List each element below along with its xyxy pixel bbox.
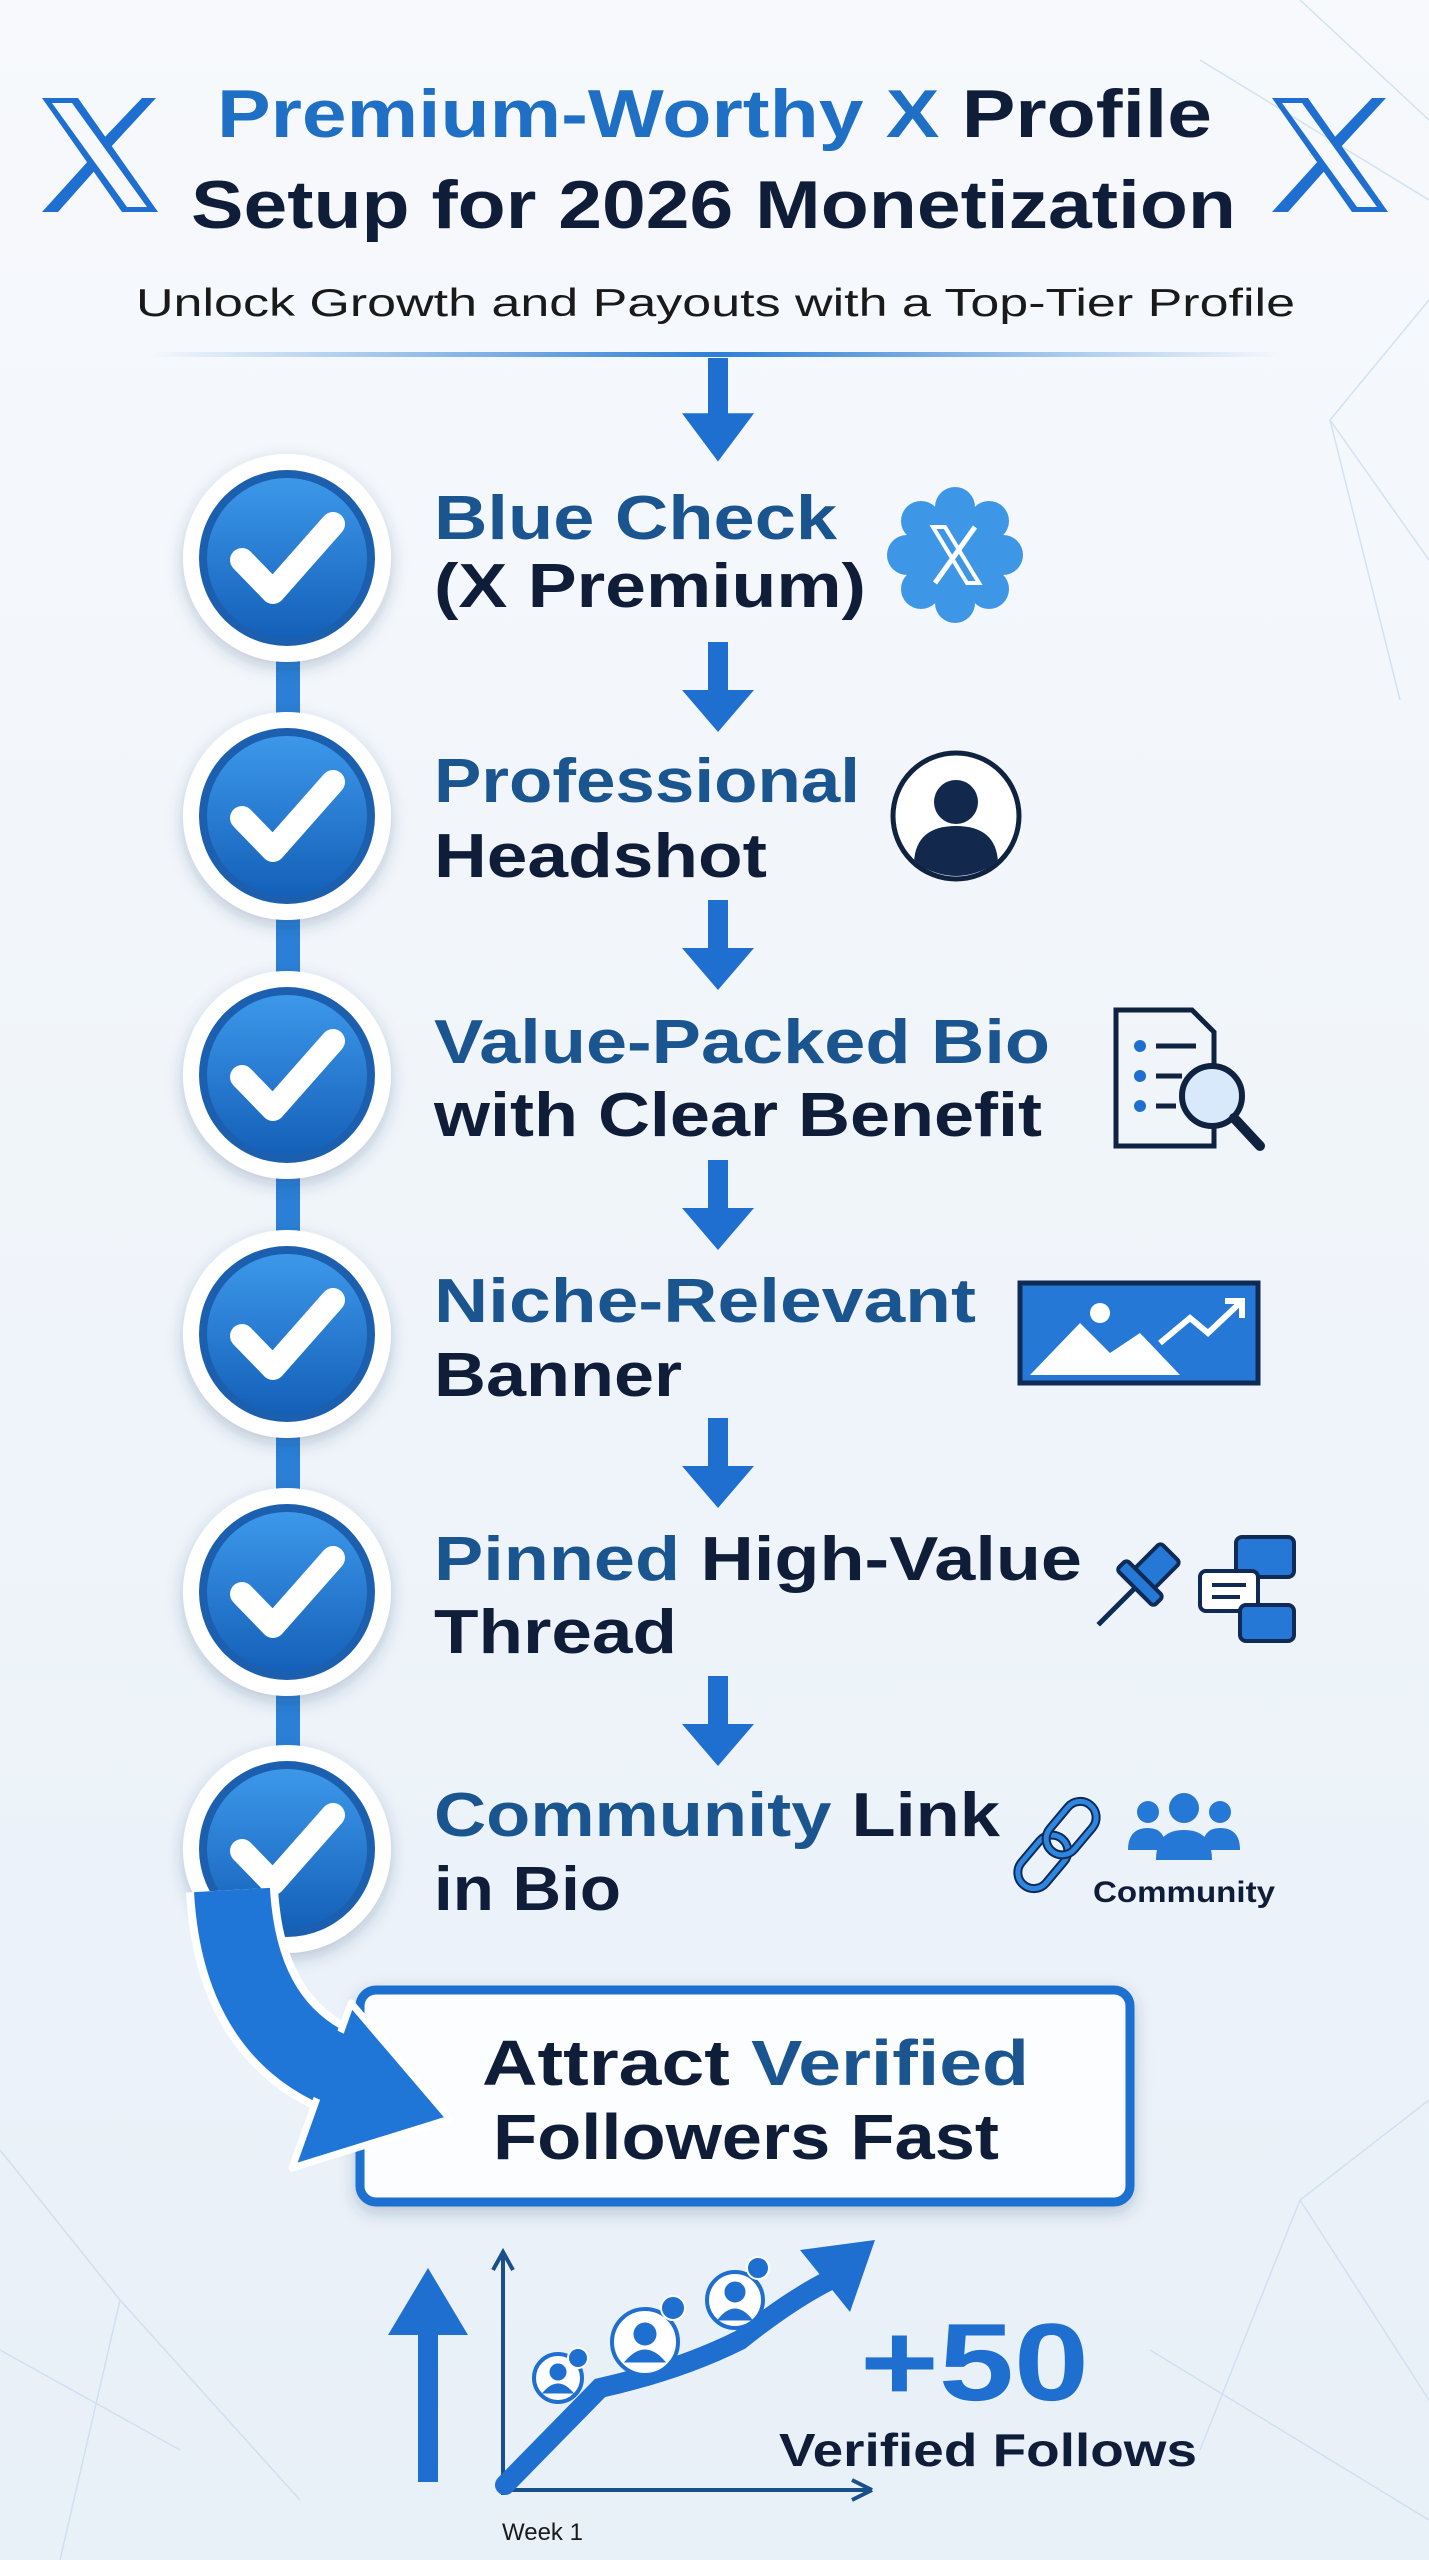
title bbox=[191, 76, 1236, 243]
title: Premium-Worthy X Profile bbox=[217, 76, 1212, 152]
icon: verified badge bbox=[887, 487, 1023, 623]
step 1: (X Premium) bbox=[434, 552, 866, 621]
step 3: with Clear Benefit bbox=[433, 1081, 1042, 1150]
icon: document search bbox=[1116, 1010, 1260, 1146]
icon: headshot bbox=[893, 753, 1019, 879]
stat: +50 verified follows: +50 bbox=[860, 2301, 1089, 2424]
arrow 4 bbox=[682, 1418, 754, 1508]
arrow: top bbox=[682, 358, 754, 462]
step 3: Value-Packed Bio bbox=[434, 1008, 1050, 1077]
arrow 5 bbox=[682, 1676, 754, 1766]
arrow: curved to result bbox=[232, 1890, 450, 2168]
icon: pin bbox=[1080, 1534, 1189, 1643]
step 1 bbox=[183, 454, 1023, 662]
icon: community people bbox=[1128, 1793, 1240, 1860]
icon: chat bubbles bbox=[1200, 1537, 1294, 1641]
step 1: Blue Check bbox=[434, 484, 838, 553]
step 6 bbox=[183, 1745, 1275, 1953]
step 5 bbox=[183, 1488, 1294, 1696]
arrow 1 bbox=[682, 642, 754, 732]
step 2: Headshot bbox=[434, 822, 767, 891]
step 6: in Bio bbox=[434, 1855, 621, 1924]
callout box: result: Attract Verified bbox=[482, 2027, 1029, 2099]
arrow 3 bbox=[682, 1160, 754, 1250]
title: Setup for 2026 Monetization bbox=[191, 167, 1236, 243]
chart: follower growth bbox=[388, 2240, 875, 2546]
label: Community: Community bbox=[1093, 1876, 1275, 1909]
subtitle: Unlock Growth and Payouts with a Top-Tier Profile bbox=[136, 282, 1295, 325]
step 4: Banner bbox=[434, 1341, 682, 1410]
stat: +50 verified follows: Verified Follows bbox=[779, 2424, 1197, 2476]
icon: link bbox=[1011, 1795, 1103, 1895]
arrow: up bbox=[388, 2268, 468, 2482]
step 4 bbox=[183, 1230, 1258, 1438]
step 2: Professional bbox=[434, 747, 860, 816]
step 5: Thread bbox=[434, 1598, 677, 1667]
icon: banner bbox=[1020, 1283, 1258, 1383]
step 3 bbox=[183, 971, 1260, 1179]
timeline line bbox=[276, 558, 300, 1848]
callout box: result: Followers Fast bbox=[493, 2101, 999, 2173]
arrow 2 bbox=[682, 900, 754, 990]
chart: follower growth: Week 1 bbox=[502, 2519, 583, 2546]
step 6: Community Link bbox=[434, 1781, 1001, 1850]
step 2 bbox=[183, 712, 1019, 920]
icon: X logo right bbox=[1272, 98, 1388, 212]
stat: +50 verified follows bbox=[779, 2301, 1197, 2476]
callout box: result bbox=[360, 1990, 1130, 2202]
icon: X logo left bbox=[42, 98, 158, 212]
step 5: Pinned High-Value bbox=[434, 1525, 1082, 1594]
step 4: Niche-Relevant bbox=[434, 1267, 976, 1336]
